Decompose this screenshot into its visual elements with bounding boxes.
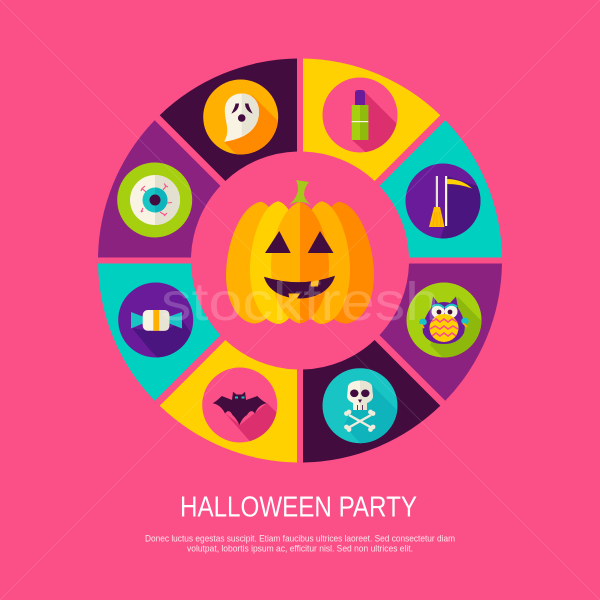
segment: candy (98, 264, 220, 401)
icon: owl (406, 282, 482, 358)
icon: eyeball (117, 162, 192, 238)
title: HALLOWEEN PARTY (180, 492, 417, 524)
pumpkin eyes (265, 231, 334, 253)
description text: volutpat, lobortis ipsum ac, efficitur nisl. Sed non ultrices elit. (187, 542, 413, 554)
icon: broom and scythe (406, 164, 480, 238)
segment: skull (303, 340, 440, 462)
description text: Donec luctus egestas suscipit. Etiam faucibus ultrices laoreet. Sed consectetur diam (145, 532, 455, 544)
segment: lipstick (303, 58, 440, 181)
segment: eyeball (98, 120, 220, 258)
icon: bat (202, 368, 278, 442)
description text (145, 532, 455, 554)
segment: broom and scythe (380, 120, 502, 258)
pumpkin (226, 180, 374, 324)
segment: ghost (160, 58, 297, 185)
pumpkin stem (288, 180, 313, 206)
pumpkin mouth (264, 276, 335, 298)
icon: ghost (203, 80, 278, 154)
pumpkin teeth (288, 280, 319, 302)
icon: candy (118, 282, 194, 358)
segment: bat (160, 340, 297, 462)
segment: owl (380, 264, 502, 401)
icon: skull (322, 368, 398, 444)
watermark: stockfresh (161, 272, 439, 332)
icon: lipstick (322, 78, 398, 152)
